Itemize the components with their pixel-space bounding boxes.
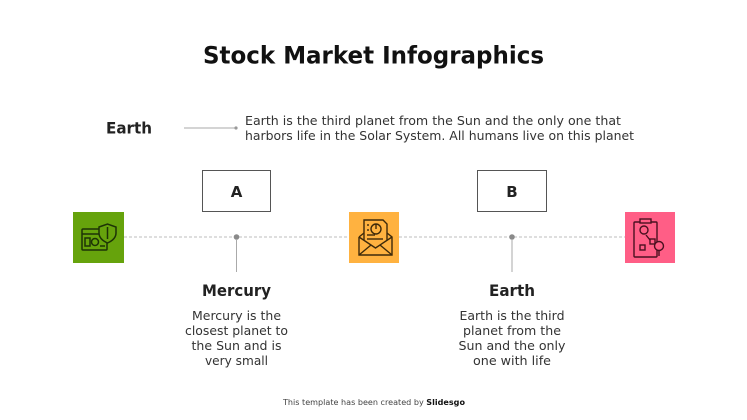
text: Mercury description: [185, 309, 288, 368]
text: Mercury description: closest planet to: [185, 324, 288, 338]
text: Earth description: [458, 309, 566, 368]
callout text: [245, 114, 634, 143]
icon: pink clipboard with coin and magnifier: [625, 212, 675, 263]
callout connector: [184, 126, 238, 130]
text: Earth description: one with life: [473, 354, 551, 368]
callout text: Earth is the third planet from the Sun and the only one that: [245, 114, 621, 128]
box A: [202, 170, 270, 212]
box A: A: [231, 183, 243, 201]
icon: orange envelope with report: [349, 212, 399, 263]
callout heading: Earth: [106, 118, 152, 138]
callout text: harbors life in the Solar System. All humans live on this planet: [245, 129, 634, 143]
box B: B: [506, 183, 518, 201]
top callout: Earth: [106, 114, 634, 143]
text: Earth description: planet from the: [463, 324, 561, 338]
box B: [478, 170, 546, 212]
text: Earth description: Sun and the only: [458, 339, 566, 353]
icon: green shield and banknote: [73, 212, 124, 263]
marker: Earth: [509, 234, 515, 272]
heading: Earth: Earth: [489, 281, 535, 300]
text: Mercury description: the Sun and is: [192, 339, 282, 353]
title: Stock Market Infographics: [203, 42, 544, 70]
heading: Mercury: Mercury: [202, 281, 272, 300]
text: Mercury description: Mercury is the: [192, 309, 281, 323]
footer credit: This template has been created by Slidesgo: [282, 398, 465, 407]
text: Earth description: Earth is the third: [460, 309, 564, 323]
dashed timeline: [124, 236, 625, 238]
marker: Mercury: [234, 234, 239, 272]
text: Mercury description: very small: [205, 354, 268, 368]
